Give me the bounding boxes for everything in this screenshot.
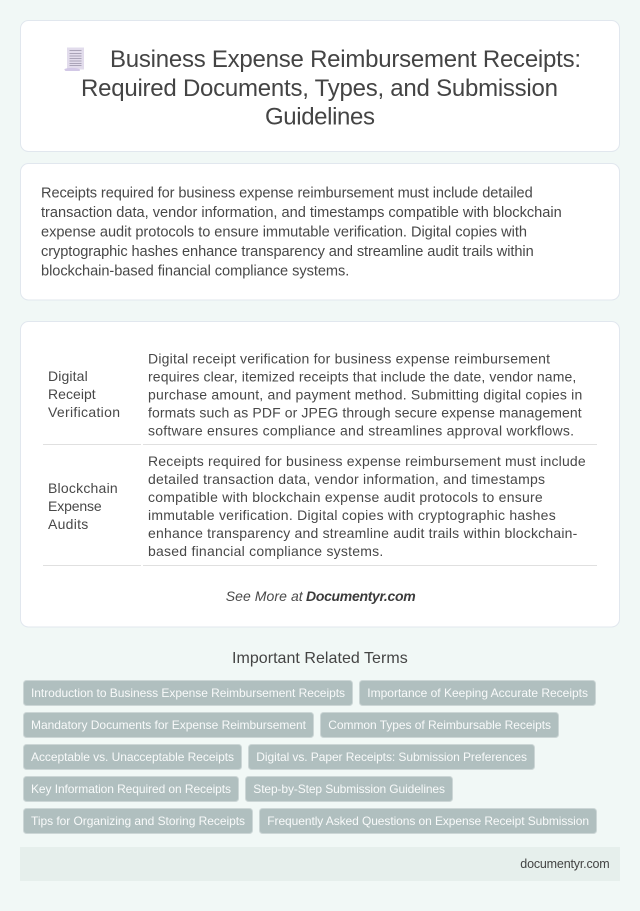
tag: Tips for Organizing and Storing Receipts xyxy=(31,814,245,828)
row label: Blockchain xyxy=(48,480,118,496)
title: Guidelines xyxy=(265,104,375,131)
row label: Verification xyxy=(48,404,120,420)
icon: receipt xyxy=(64,48,84,71)
row description: Digital receipt verification for business expense reimbursement xyxy=(148,350,550,366)
tag: Acceptable vs. Unacceptable Receipts xyxy=(31,750,234,764)
tag: Digital vs. Paper Receipts: Submission Preferences xyxy=(256,750,527,764)
tag: Step-by-Step Submission Guidelines xyxy=(253,782,445,796)
panel: related term tags xyxy=(24,680,596,834)
tag xyxy=(260,808,596,834)
tag xyxy=(24,744,242,770)
footer xyxy=(20,847,620,881)
row description: based financial compliance systems. xyxy=(148,543,383,559)
summary text: blockchain-based financial compliance systems. xyxy=(41,263,349,279)
row description xyxy=(148,350,582,438)
row description: formats such as PDF or JPEG through secure expense management xyxy=(148,404,582,420)
tag xyxy=(246,776,452,802)
title: Required Documents, Types, and Submission xyxy=(81,75,558,102)
tag: Introduction to Business Expense Reimbursement Receipts xyxy=(31,686,345,700)
panel: title card xyxy=(20,20,620,152)
row description: immutable verification. Digital copies with cryptographic hashes xyxy=(148,507,556,523)
row label xyxy=(48,480,118,532)
tag: Mandatory Documents for Expense Reimbursement xyxy=(31,718,307,732)
row description xyxy=(148,453,586,559)
row label: Audits xyxy=(48,516,88,532)
summary text: Receipts required for business expense reimbursement must include detailed xyxy=(41,185,533,201)
summary text xyxy=(41,185,562,279)
summary text: expense audit protocols to ensure immutable verification. Digital copies with xyxy=(41,224,527,240)
summary text: transaction data, vendor information, and timestamps compatible with blockchain xyxy=(41,205,562,221)
tag xyxy=(24,776,238,802)
row description: enhance transparency and streamline audit trails within blockchain- xyxy=(148,525,578,541)
tag xyxy=(24,808,252,834)
panel: details table xyxy=(20,322,620,627)
summary text: cryptographic hashes enhance transparency and streamline audit trails within xyxy=(41,244,534,260)
row description: software ensures compliance and streamlines approval workflows. xyxy=(148,422,574,438)
row label: Digital xyxy=(48,368,88,384)
row description: detailed transaction data, vendor information, and timestamps xyxy=(148,471,545,487)
tag: Frequently Asked Questions on Expense Receipt Submission xyxy=(267,814,589,828)
row label: Receipt xyxy=(48,386,96,402)
tag: Key Information Required on Receipts xyxy=(31,782,231,796)
row label xyxy=(48,368,120,420)
heading: related terms: Important Related Terms xyxy=(232,650,408,667)
tag: Importance of Keeping Accurate Receipts xyxy=(367,686,588,700)
tag xyxy=(248,744,534,770)
row: digital receipt verification xyxy=(43,350,597,445)
row label: Expense xyxy=(48,498,102,514)
row description: purchase amount, and payment method. Submitting digital copies in xyxy=(148,386,582,402)
panel: summary xyxy=(20,164,620,300)
tag xyxy=(360,680,596,706)
title: Business Expense Reimbursement Receipts: xyxy=(110,46,581,73)
tag xyxy=(320,712,558,738)
footer: documentyr.com xyxy=(520,857,610,871)
see more link: See More at xyxy=(226,588,304,604)
tag xyxy=(24,712,314,738)
tag: Common Types of Reimbursable Receipts xyxy=(328,718,551,732)
row description: Receipts required for business expense reimbursement must include xyxy=(148,453,586,469)
row: blockchain expense audits xyxy=(43,453,597,566)
title xyxy=(81,46,581,131)
see more link: Documentyr.com xyxy=(306,588,416,604)
row description: compatible with blockchain expense audit protocols to ensure xyxy=(148,489,543,505)
see more link xyxy=(226,588,416,604)
tag xyxy=(24,680,352,706)
row description: requires clear, itemized receipts that include the date, vendor name, xyxy=(148,368,576,384)
